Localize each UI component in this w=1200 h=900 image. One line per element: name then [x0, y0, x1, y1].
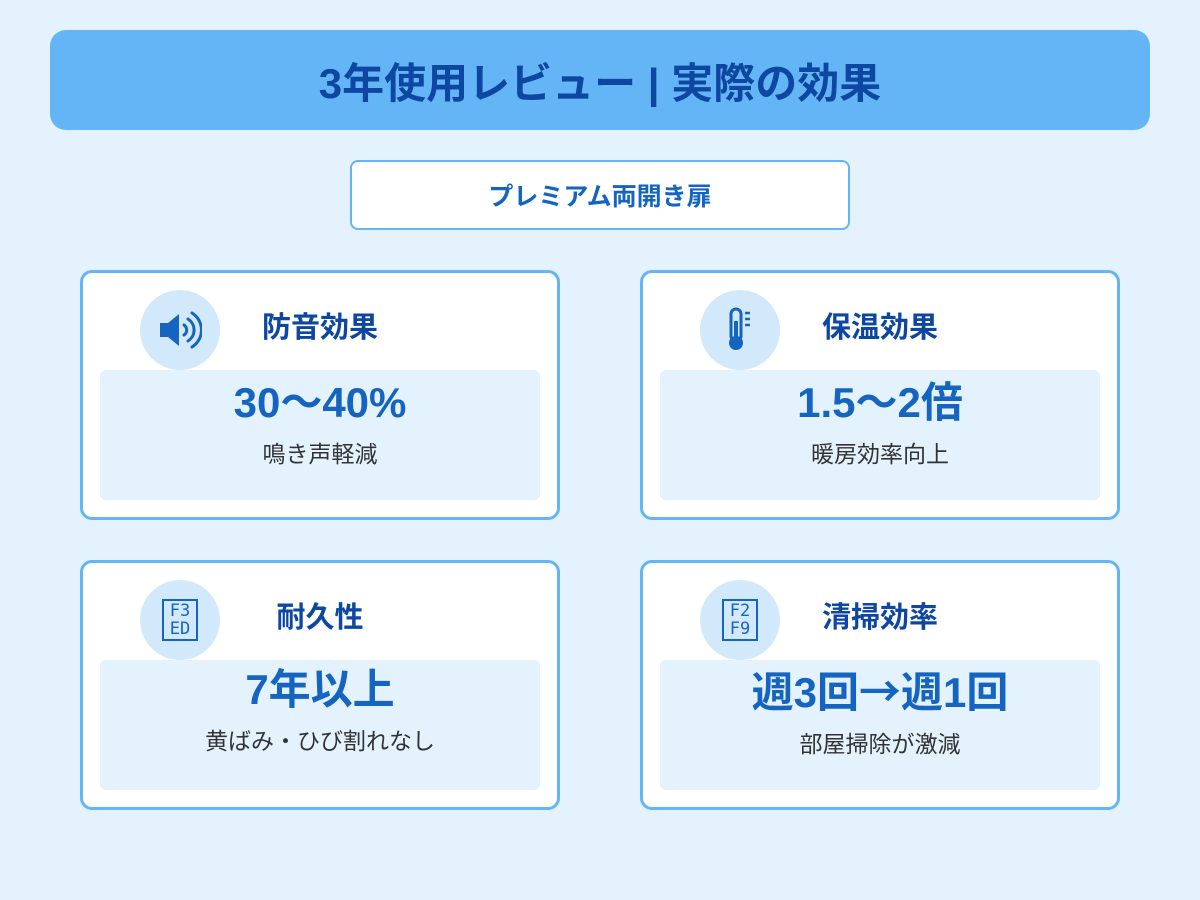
title [50, 30, 1150, 130]
stat box: 黄ばみ・ひび割れなし [205, 728, 435, 754]
icon: thermometer [700, 290, 780, 370]
icon: glyph box: ED [170, 619, 190, 639]
panel: cleaning [640, 560, 1120, 810]
icon: glyph box [140, 580, 220, 660]
icon: glyph box: F9 [730, 619, 750, 639]
stat box: 30～40% [234, 369, 406, 430]
heading: 保温効果 [822, 312, 938, 344]
icon: glyph box: F2 [730, 601, 750, 621]
stat box: 部屋掃除が激減 [800, 731, 960, 757]
icon: glyph box [700, 580, 780, 660]
stat box [660, 370, 1100, 500]
stat box [660, 660, 1100, 790]
panel: soundproof [80, 270, 560, 520]
subtitle: プレミアム両開き扉 [488, 183, 712, 211]
heading: 防音効果 [262, 312, 378, 344]
stat box: 7年以上 [245, 666, 395, 713]
icon: speaker [140, 290, 220, 370]
stat box: 週3回→週1回 [752, 659, 1008, 720]
stat box: 鳴き声軽減 [262, 441, 378, 467]
heading: 耐久性 [276, 602, 364, 634]
stat box: 1.5～2倍 [797, 369, 963, 430]
panel: durability [80, 560, 560, 810]
stat box [100, 370, 540, 500]
title: 3年使用レビュー | 実際の効果 [319, 60, 881, 106]
stat box: 暖房効率向上 [811, 441, 949, 467]
subtitle [350, 160, 850, 230]
icon: glyph box: F3 [170, 601, 190, 621]
stat box [100, 660, 540, 790]
panel: insulation [640, 270, 1120, 520]
heading: 清掃効率 [822, 602, 938, 634]
